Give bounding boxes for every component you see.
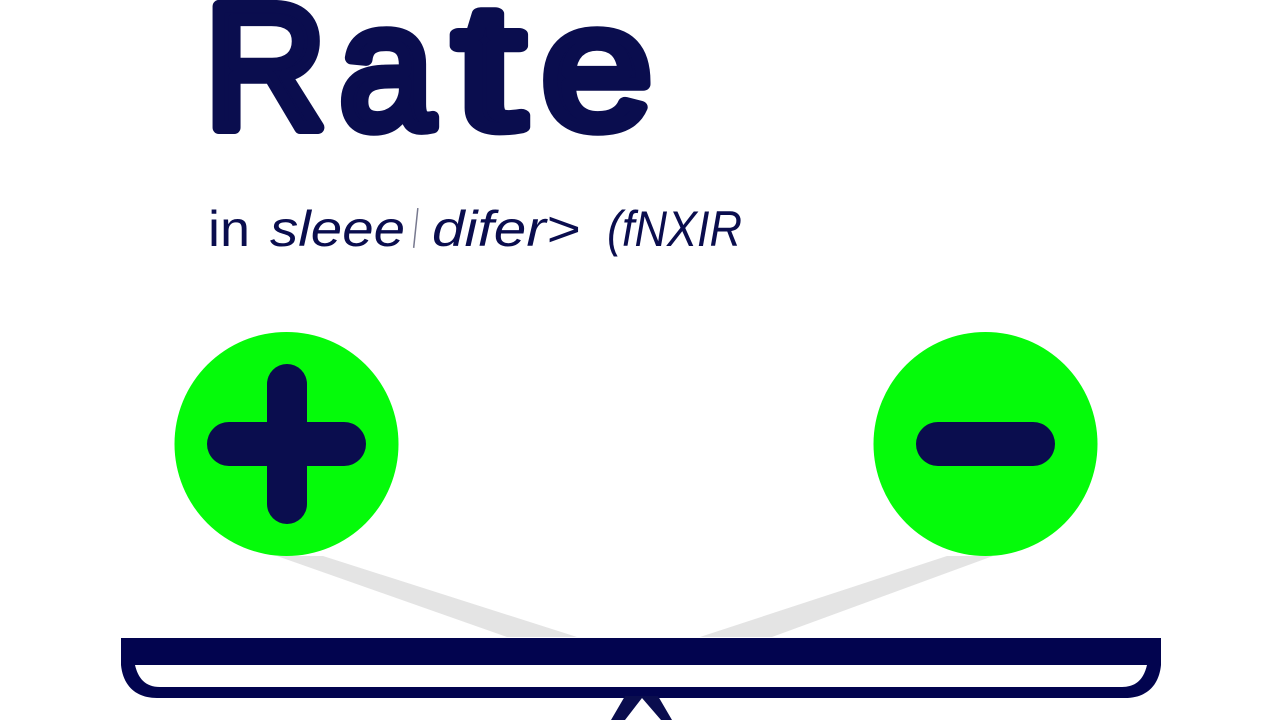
balance beam tray (121, 638, 1161, 698)
subtitle text: sleee (270, 201, 405, 257)
left support line (277, 556, 577, 637)
subtitle text: in (208, 201, 250, 257)
title (205, 0, 652, 166)
subtitle text: difer> (432, 201, 580, 257)
icon: plus in green circle (174, 332, 398, 556)
subtitle text: (fNXIR (607, 201, 742, 257)
icon: minus in green circle (874, 332, 1098, 556)
balance fulcrum (611, 696, 672, 720)
right support line (700, 556, 993, 637)
subtitle text (208, 201, 742, 257)
